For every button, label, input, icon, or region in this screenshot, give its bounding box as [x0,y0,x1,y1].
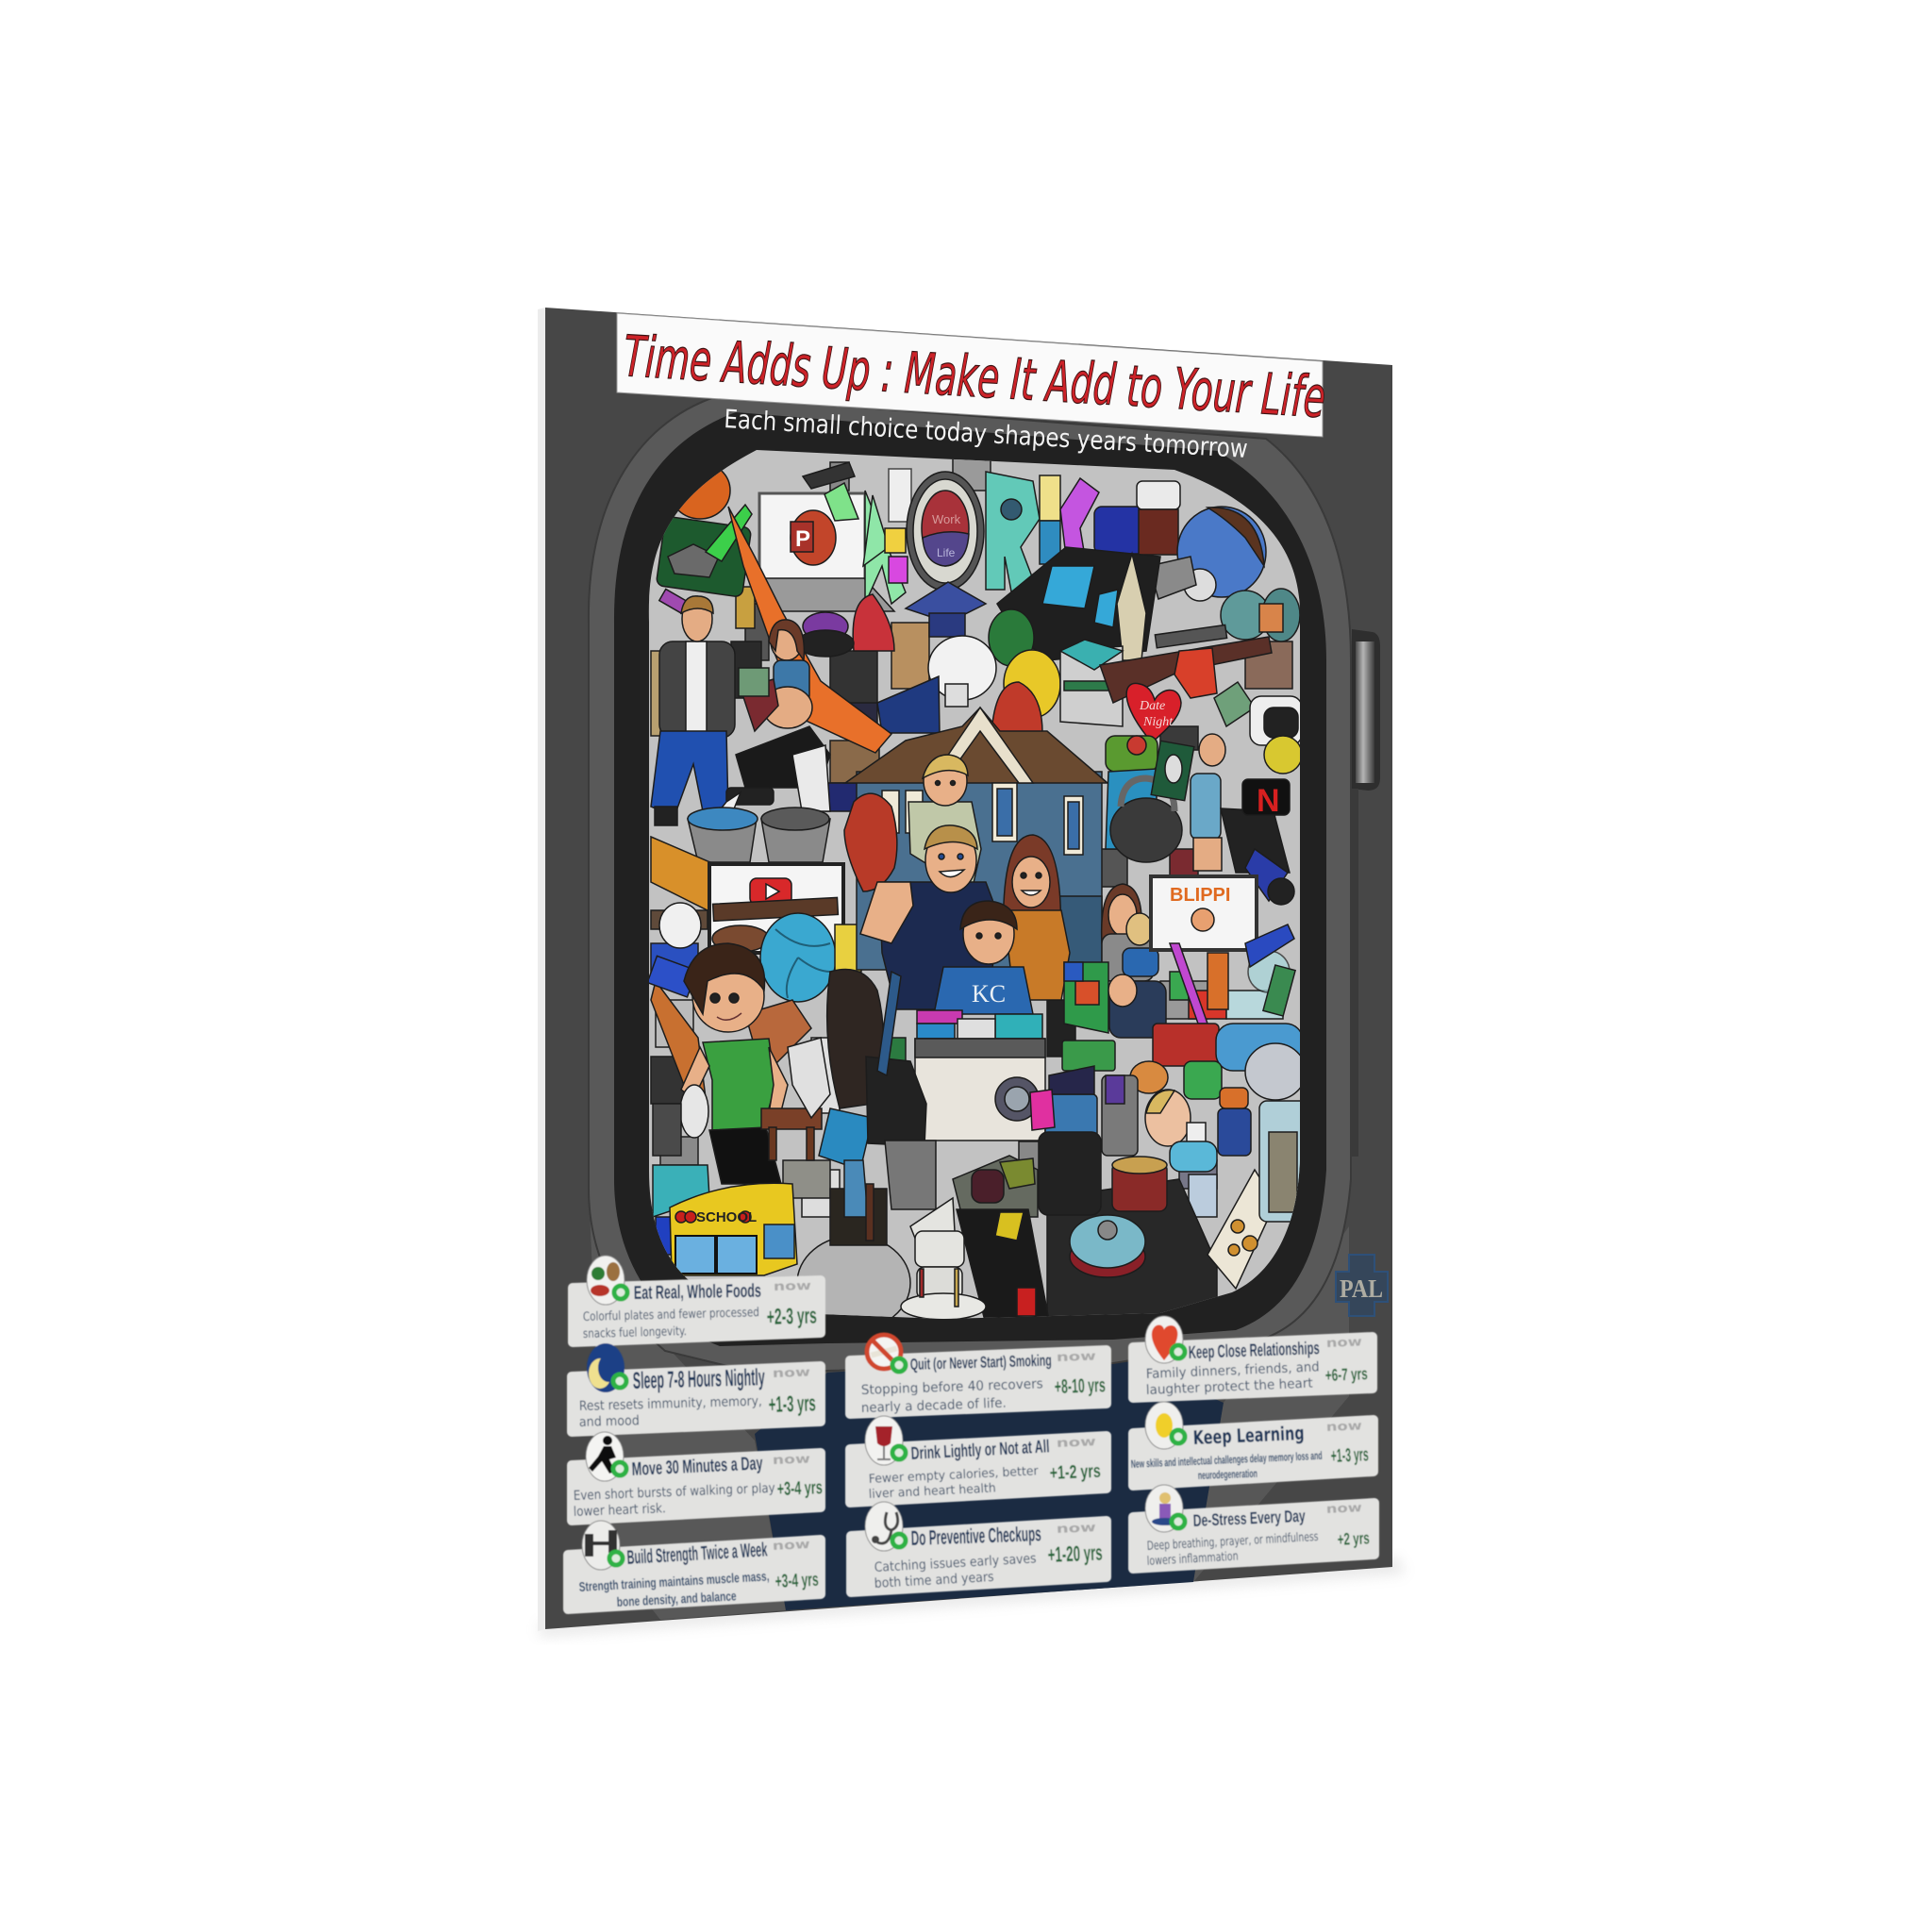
card: Build Strength Twice a Week: bone density, and balance [616,1588,737,1609]
cleaning [953,1066,1138,1217]
mother and baby with Blippi screen: BLIPPI [1170,885,1230,906]
dishes and foam [797,1160,986,1330]
PAL logo [1336,1255,1388,1316]
card: Keep Close Relationships: Keep Close Relationships [1188,1339,1320,1363]
illustration: collage of everyday life [641,443,1311,1330]
icon: meditating person [1145,1485,1185,1532]
card: Drink Lightly or Not at All: now [1057,1435,1096,1451]
icon: dumbbell [582,1521,623,1570]
school bus: SCHOOL [696,1209,757,1225]
card: De-Stress Every Day: now [1325,1501,1362,1517]
card: Move 30 Minutes a Day: +3-4 yrs [776,1477,823,1500]
paddle [728,507,891,753]
card: Build Strength Twice a Week: +3-4 yrs [774,1570,819,1592]
card: Keep Close Relationships: +6-7 yrs [1324,1364,1368,1385]
card: Drink Lightly or Not at All: liver and heart health [868,1481,996,1502]
card: Eat Real, Whole Foods: +2-3 yrs [766,1303,817,1330]
subtitle: Each small choice today shapes years tomorrow [724,405,1248,464]
stove and pots [957,1101,1307,1321]
card: Drink Lightly or Not at All: Fewer empty calories, better [868,1464,1040,1487]
school bus [670,1183,797,1275]
lower bezel band [590,1208,786,1620]
card: Quit Smoking: Stopping before 40 recovers [861,1376,1043,1398]
card: Drink Lightly or Not at All: Drink Lightly or Not at All [910,1437,1050,1464]
card: Do Preventive Checkups: +1-20 yrs [1047,1540,1103,1567]
card: Quit Smoking: Quit (or Never Start) Smoking [910,1352,1052,1374]
poster shadow [540,1557,1406,1637]
card: Drink Lightly or Not at All [850,1416,1107,1503]
card: Eat Real, Whole Foods: now [774,1279,811,1294]
poster background [545,308,1392,1629]
card: Sleep 7-8 Hours Nightly: Rest resets immunity, memory, [579,1394,762,1414]
boy in green shirt [680,943,788,1184]
icon: no smoking [867,1335,906,1372]
card: Do Preventive Checkups: now [1057,1521,1096,1537]
icon: sun [1145,1402,1185,1449]
card: Sleep 7-8 Hours Nightly: Sleep 7-8 Hours Nightly [632,1364,765,1394]
card: Move 30 Minutes a Day: Even short bursts of walking or play [574,1481,775,1504]
card: Move 30 Minutes a Day: lower heart risk. [574,1501,666,1520]
window black frame [614,412,1326,1346]
card: Keep Close Relationships: laughter protect the heart [1145,1376,1313,1398]
card: Keep Learning: +1-3 yrs [1330,1444,1369,1467]
icon: moon [587,1343,626,1392]
baby drinking bottle [1145,1088,1251,1172]
card: Sleep 7-8 Hours Nightly [572,1343,821,1432]
right lower bezel band [1193,1226,1349,1582]
work items: Work [932,512,961,526]
card: Keep Learning: Keep Learning [1192,1422,1305,1449]
card: Move 30 Minutes a Day: Move 30 Minutes a Day [631,1453,764,1480]
card: Do Preventive Checkups: Catching issues early saves [874,1551,1037,1575]
card: Keep Close Relationships: now [1326,1335,1362,1351]
poster edge [538,308,545,1631]
title banner [617,313,1327,437]
card: De-Stress Every Day: De-Stress Every Day [1192,1507,1306,1530]
card: Drink Lightly or Not at All: +1-2 yrs [1049,1461,1101,1484]
card: Build Strength Twice a Week: now [772,1538,810,1554]
laundry and washer [915,1010,1045,1141]
card: Eat Real, Whole Foods: Colorful plates and fewer processed [583,1306,759,1324]
card: Quit Smoking: now [1057,1350,1096,1365]
navy panel [755,1354,1224,1610]
mother and baby with Blippi screen [1102,876,1295,1016]
work items: Life [937,546,956,559]
card: Do Preventive Checkups [851,1502,1107,1592]
poster scene [538,308,1403,1638]
red tree [844,793,897,891]
vehicle and hats [797,547,1302,745]
icon: stethoscope [865,1502,906,1551]
card: Sleep 7-8 Hours Nightly: +1-3 yrs [768,1391,816,1418]
right top items: N [1257,783,1280,819]
card: Do Preventive Checkups: Do Preventive Checkups [910,1522,1041,1550]
card: Keep Close Relationships: Family dinners, friends, and [1145,1359,1320,1382]
card: Build Strength Twice a Week: Strength training maintains muscle mass, [578,1568,770,1594]
family [860,755,1070,1014]
left floor items [653,1038,873,1217]
right top items [1106,734,1302,905]
card: De-Stress Every Day: +2 yrs [1337,1528,1370,1549]
card: Keep Learning: New skills and intellectual challenges delay memory loss and [1131,1449,1323,1471]
card: Move 30 Minutes a Day: now [773,1452,810,1468]
card: Keep Close Relationships [1133,1316,1373,1398]
card: Eat Real, Whole Foods [573,1256,821,1342]
vehicle and hats: Night [1142,715,1174,729]
card: Do Preventive Checkups: both time and years [874,1570,994,1591]
card: Move 30 Minutes a Day [572,1432,823,1521]
work items: P [795,526,810,552]
toys right [1062,943,1306,1100]
icon: wine glass [865,1416,906,1465]
card: Quit Smoking: +8-10 yrs [1054,1374,1106,1398]
card: Build Strength Twice a Week [568,1521,821,1609]
filler items [651,453,1292,1255]
card: Eat Real, Whole Foods: Eat Real, Whole Foods [634,1281,761,1304]
title text: Time Adds Up : Make It Add to Your Life [622,324,1327,431]
vehicle and hats: Date [1139,699,1165,713]
house [845,708,1108,970]
card: Keep Learning: now [1326,1419,1362,1435]
card: Build Strength Twice a Week: Build Strength Twice a Week [626,1539,768,1569]
card: Sleep 7-8 Hours Nightly: now [773,1366,810,1381]
card: Keep Learning: neurodegeneration [1198,1467,1257,1482]
card: Keep Learning [1131,1402,1374,1486]
card: Quit Smoking [850,1335,1107,1416]
pet bowls [688,808,830,862]
card: De-Stress Every Day: lowers inflammation [1146,1550,1239,1569]
card: De-Stress Every Day [1133,1485,1374,1569]
door handle [1351,629,1380,1157]
man and woman with dog [651,596,830,825]
dark hair and bag [827,970,936,1209]
work items [656,462,1300,641]
toys and sports [647,837,861,1113]
family: KC [972,980,1006,1008]
PAL logo: PAL [1340,1274,1383,1303]
card: Eat Real, Whole Foods: snacks fuel longevity. [583,1324,687,1341]
window outer bezel [589,396,1351,1373]
icon: heart [1145,1316,1185,1363]
icon: runner [586,1432,626,1481]
card: Quit Smoking: nearly a decade of life. [861,1396,1007,1416]
card: De-Stress Every Day: Deep breathing, prayer, or mindfulness [1146,1530,1319,1554]
icon: food [587,1256,627,1305]
card: Sleep 7-8 Hours Nightly: and mood [579,1413,640,1430]
